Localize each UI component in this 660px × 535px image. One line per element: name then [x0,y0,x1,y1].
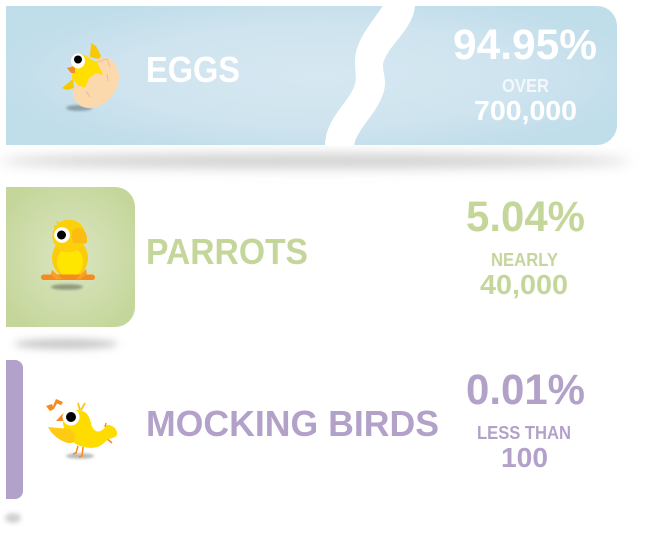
heading: mocking birds: MOCKING BIRDS [146,403,439,444]
shadow: mocking birds panel [5,513,21,523]
heading: parrots: PARROTS [146,231,308,272]
wave divider [325,5,415,146]
icon: chick hatching from egg [62,43,119,111]
panel: eggs [6,5,617,146]
shadow: eggs panel [0,154,630,168]
stat: mocking birds: 0.01% [466,366,585,414]
stat: parrots: NEARLY [491,250,558,270]
stat: parrots: 5.04% [466,193,585,241]
stat: mocking birds: LESS THAN [477,423,571,443]
icon: parrot on perch [41,220,95,290]
stat: eggs: 700,000 [474,95,577,126]
stat: mocking birds [466,366,585,473]
stat: parrots [466,193,585,300]
stat: eggs: OVER [502,76,549,96]
stat: parrots: 40,000 [480,269,568,300]
panel: mocking birds [6,360,23,499]
stat: eggs: 94.95% [453,21,597,69]
panel: parrots [6,187,135,327]
shadow: parrots panel [14,339,118,349]
heading: eggs: EGGS [146,49,240,90]
icon: singing bird [46,399,117,459]
stat: eggs [453,21,597,126]
stat: mocking birds: 100 [501,442,548,473]
